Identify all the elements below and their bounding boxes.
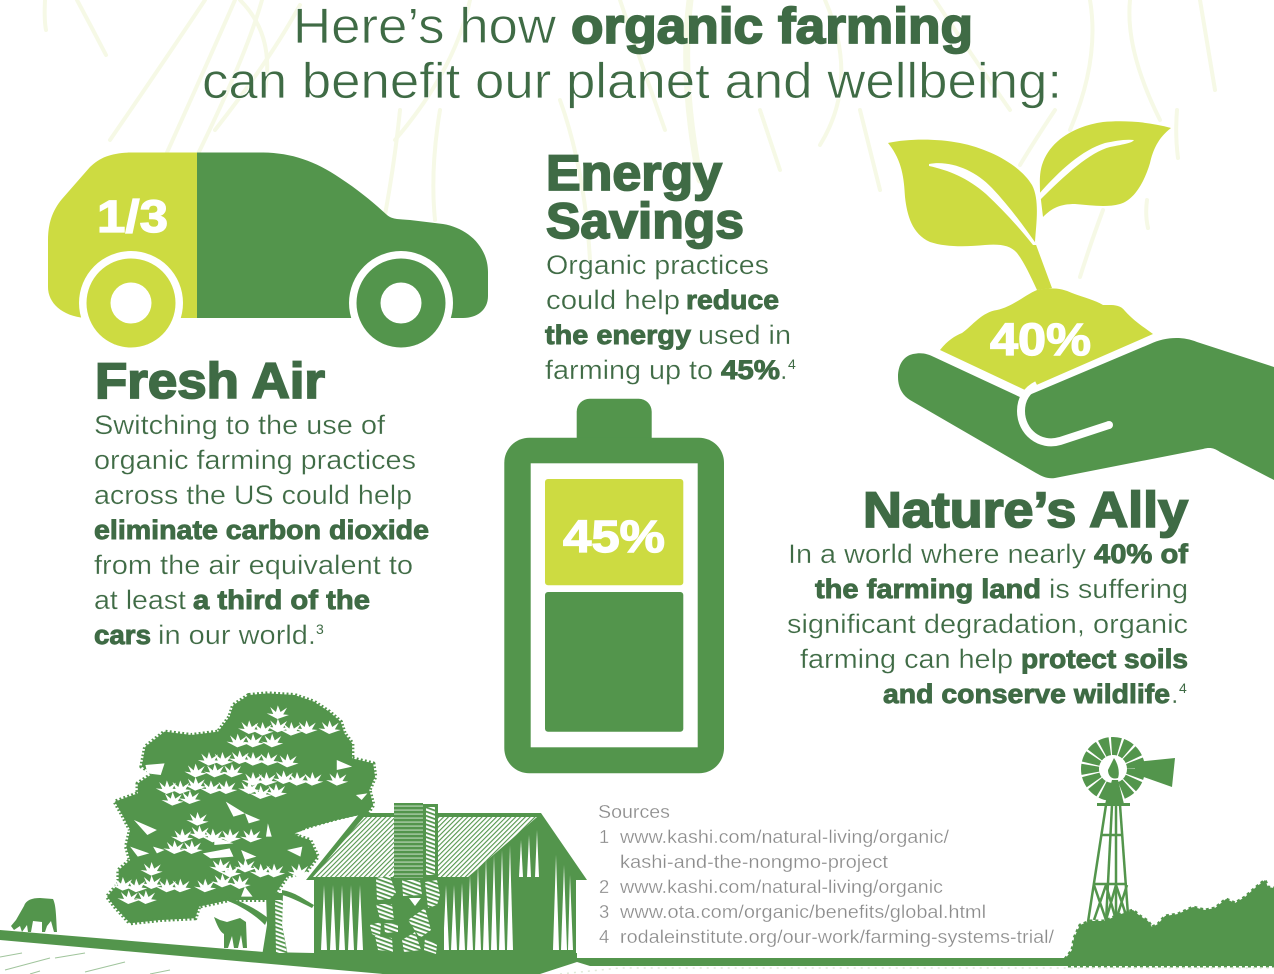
- panel: fresh air: Fresh Air: [95, 353, 325, 409]
- sources: rodaleinstitute.org/our-work/farming-systems-trial/: [620, 926, 1055, 947]
- panel: fresh air: 3: [316, 621, 324, 637]
- panel: energy savings: farming up to: [545, 355, 713, 385]
- panel: fresh air: across the US could help: [94, 480, 412, 510]
- illustration: calf: [214, 917, 247, 948]
- illustration: hedgerow bushes: [1065, 880, 1274, 966]
- icon: battery 45 percent: [504, 399, 724, 773]
- title: [202, 0, 1062, 109]
- icon: hand holding seedling: [888, 121, 1274, 480]
- panel: nature's ally: the farming land: [815, 574, 1041, 604]
- icon: battery 45 percent: 45%: [563, 511, 665, 562]
- sources: www.ota.com/organic/benefits/global.html: [619, 901, 986, 922]
- panel: energy savings: reduce: [686, 285, 779, 315]
- panel: fresh air: eliminate carbon dioxide: [94, 515, 429, 545]
- illustration: tree: [107, 693, 375, 956]
- panel: nature's ally: Nature’s Ally: [863, 482, 1188, 538]
- panel: nature's ally: and conserve wildlife: [883, 679, 1170, 709]
- panel: fresh air: at least: [94, 585, 187, 615]
- panel: energy savings: 4: [788, 356, 796, 372]
- illustration: windmill: [1088, 746, 1175, 922]
- icon: car one third: 1/3: [97, 191, 168, 242]
- illustration: grazing cow: [11, 898, 57, 932]
- sources: [598, 801, 1055, 947]
- panel: energy savings: Energy: [546, 145, 722, 201]
- panel: fresh air: Switching to the use of: [94, 410, 386, 440]
- sources: 3: [599, 901, 609, 922]
- panel: fresh air: from the air equivalent to: [94, 550, 413, 580]
- panel: nature's ally: 40% of: [1094, 539, 1189, 569]
- field dots: [560, 968, 1274, 974]
- title: can benefit our planet and wellbeing:: [202, 53, 1062, 109]
- panel: nature's ally: In a world where nearly: [788, 539, 1087, 569]
- sources: 4: [599, 926, 609, 947]
- panel: energy savings: 45%: [721, 355, 780, 385]
- panel: fresh air: organic farming practices: [94, 445, 416, 475]
- panel: nature's ally: farming can help: [800, 644, 1013, 674]
- sources: 2: [599, 876, 609, 897]
- panel: fresh air: [94, 353, 429, 650]
- panel: nature's ally: protect soils: [1021, 644, 1188, 674]
- icon: hand holding seedling: 40%: [990, 314, 1091, 365]
- ground line: [0, 930, 1070, 974]
- panel: nature's ally: 4: [1179, 680, 1187, 696]
- field furrows: [0, 953, 170, 974]
- panel: fresh air: a third of the: [193, 585, 370, 615]
- illustration: barn: [306, 803, 587, 954]
- sources: 1: [599, 826, 609, 847]
- panel: energy savings: Savings: [546, 193, 744, 249]
- panel: nature's ally: [787, 482, 1189, 709]
- sources: www.kashi.com/natural-living/organic/: [619, 826, 950, 847]
- panel: energy savings: Organic practices: [546, 250, 769, 280]
- panel: energy savings: could help: [546, 285, 680, 315]
- icon: car one third: [48, 152, 488, 355]
- panel: energy savings: the energy: [545, 320, 691, 350]
- sources: www.kashi.com/natural-living/organic: [619, 876, 943, 897]
- sources: Sources: [598, 801, 670, 822]
- panel: energy savings: .: [780, 355, 788, 385]
- panel: fresh air: in our world.: [158, 620, 316, 650]
- panel: fresh air: cars: [94, 620, 151, 650]
- panel: energy savings: used in: [698, 320, 791, 350]
- background wheat pattern: [45, 0, 1215, 277]
- panel: nature's ally: significant degradation, organic: [787, 609, 1188, 639]
- panel: energy savings: [545, 145, 796, 385]
- panel: nature's ally: is suffering: [1049, 574, 1188, 604]
- panel: nature's ally: .: [1171, 679, 1179, 709]
- sources: kashi-and-the-nongmo-project: [620, 851, 888, 872]
